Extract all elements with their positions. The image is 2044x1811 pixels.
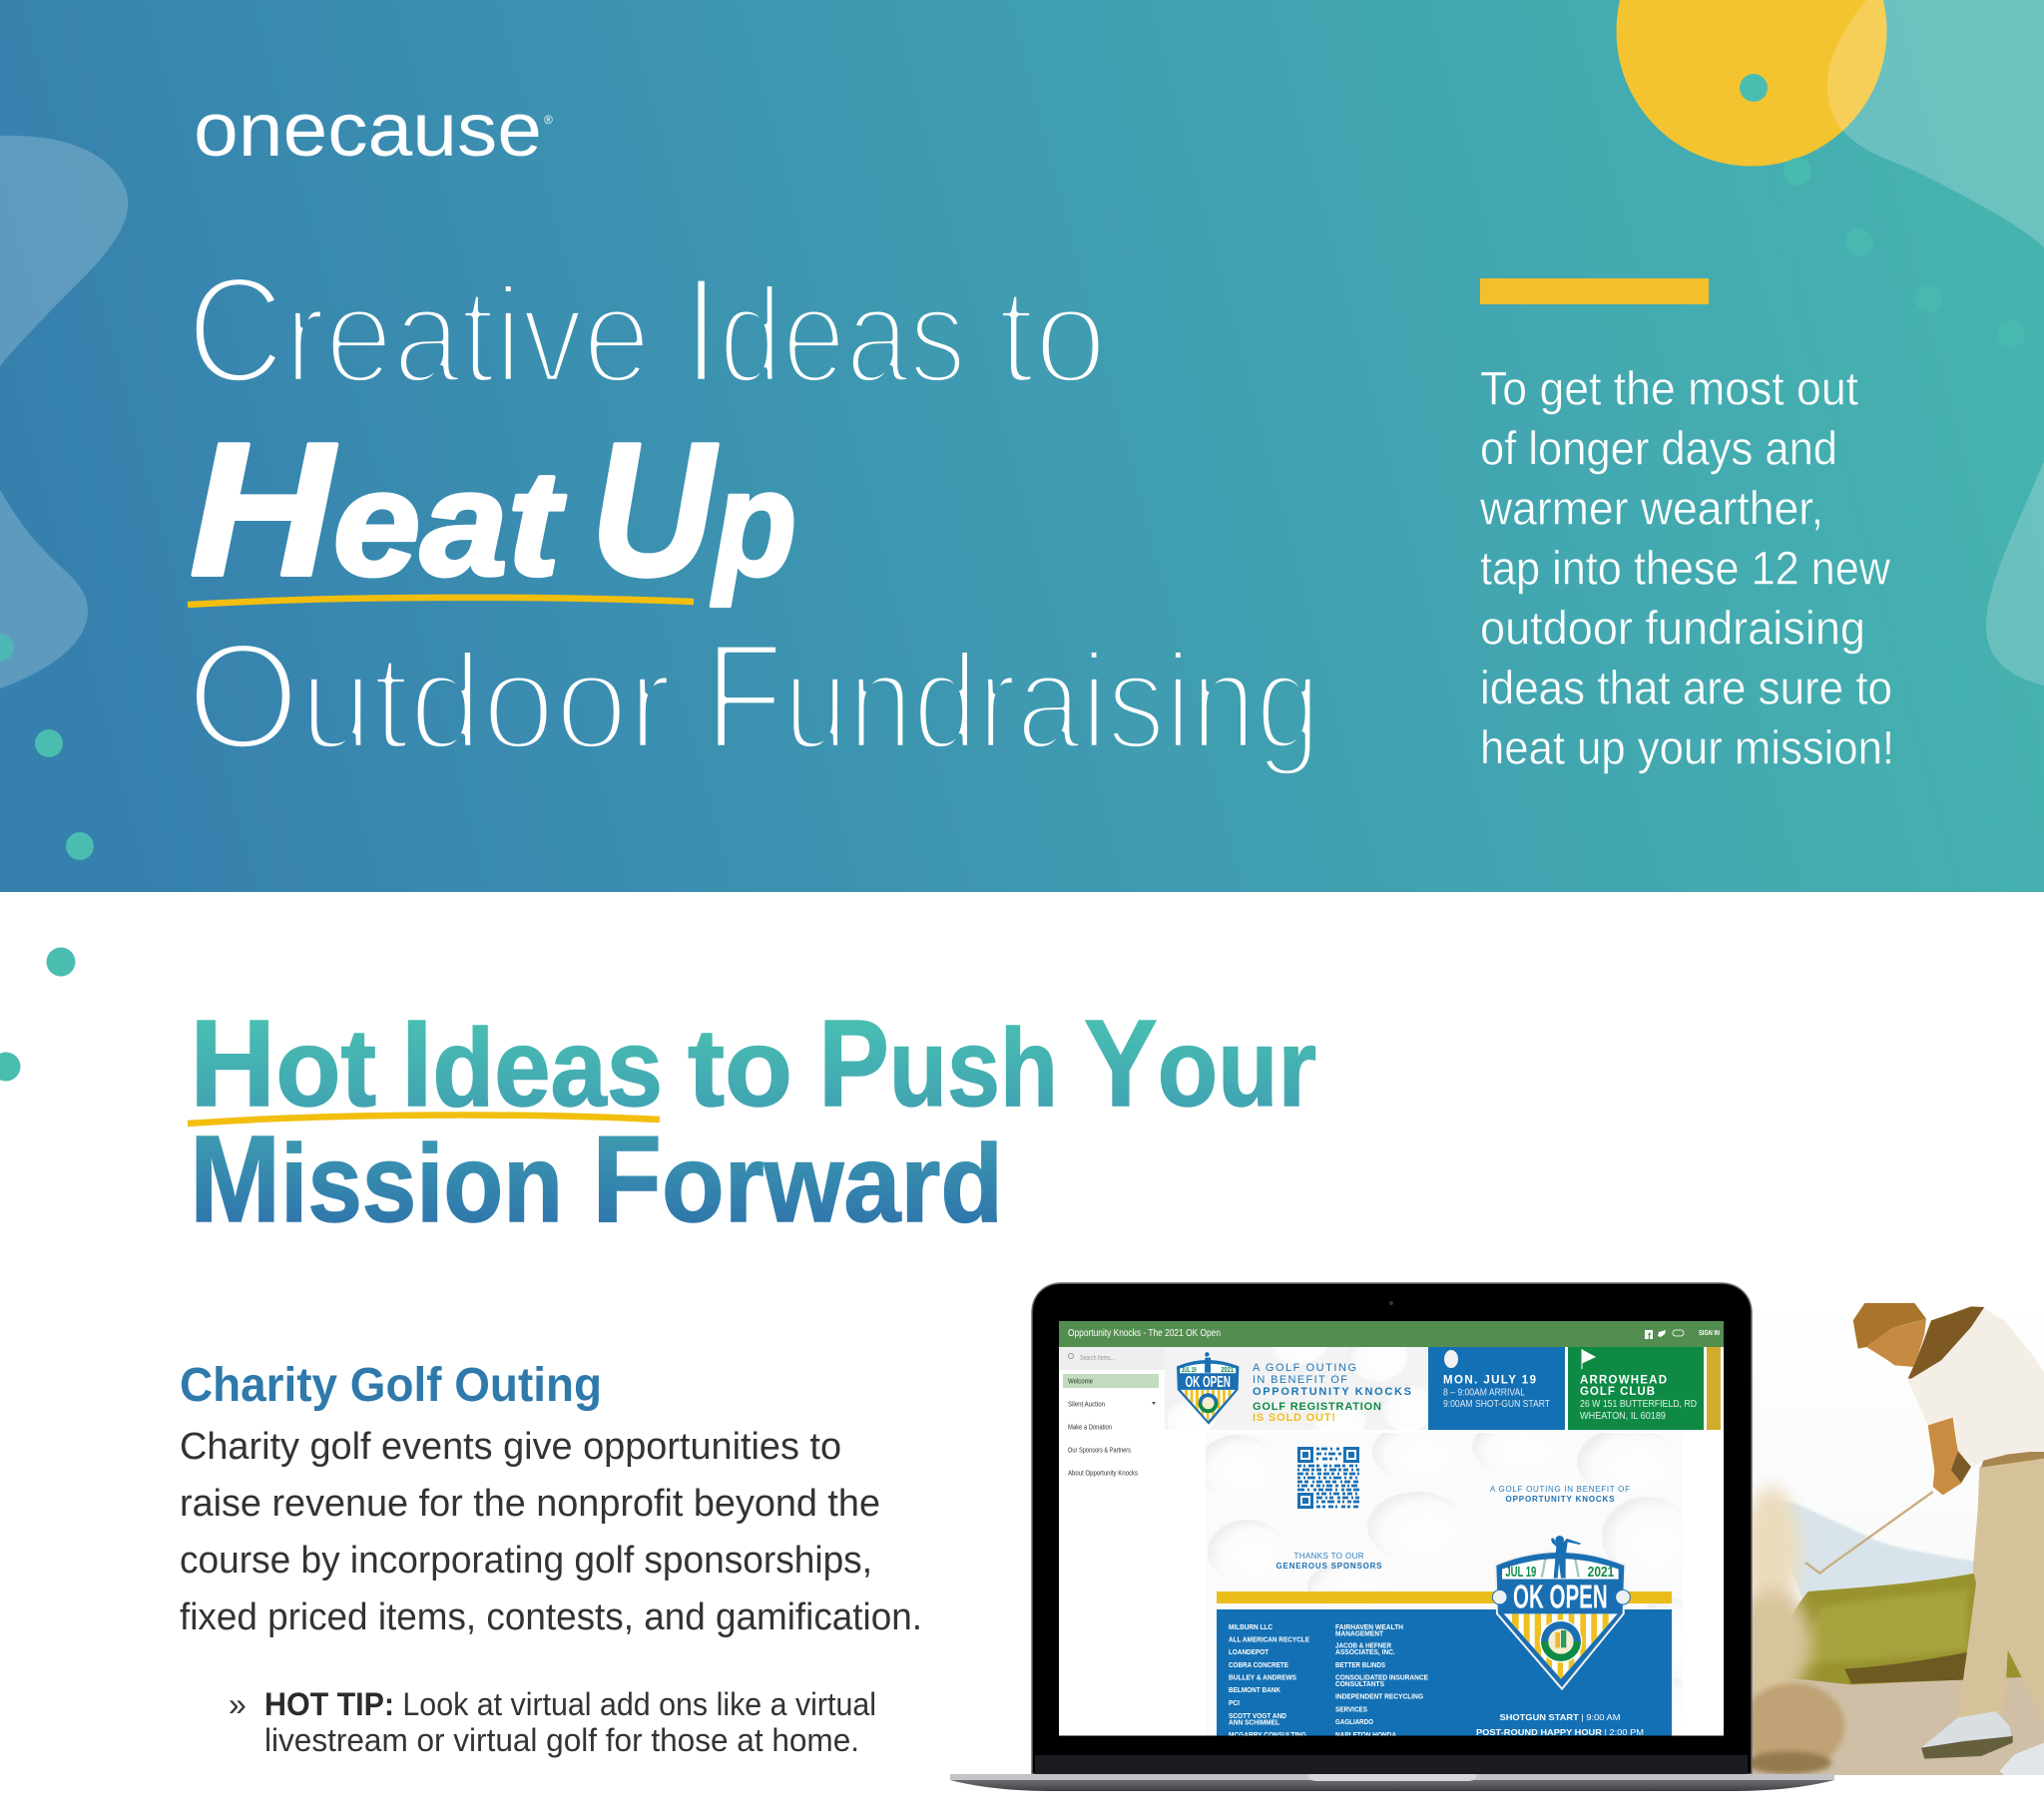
heading underline bbox=[188, 1115, 660, 1124]
screen: event poster: OPPORTUNITY KNOCKS bbox=[1505, 1495, 1615, 1504]
banner: small badge: JUL 19 bbox=[1182, 1367, 1197, 1374]
poster: sponsors panel: ASSOCIATES, INC. bbox=[1335, 1649, 1395, 1656]
title: Creative Ideas to Heat Up Outdoor Fundraising: Up bbox=[591, 404, 796, 616]
intro paragraph: of longer days and bbox=[1480, 421, 1837, 475]
poster: sponsors panel: SHOTGUN START | 9:00 AM bbox=[1499, 1712, 1621, 1722]
callout: hot tip: » bbox=[229, 1686, 247, 1722]
golfer: trousers bbox=[1958, 1458, 2044, 1721]
decorative dots: white section bbox=[0, 948, 76, 1082]
title: Creative Ideas to Heat Up Outdoor Fundraising: Outdoor bbox=[187, 612, 672, 781]
screen: golf banner: IS SOLD OUT! bbox=[1253, 1412, 1335, 1424]
banner: small badge: OK OPEN bbox=[1185, 1374, 1231, 1391]
heading: Hot Ideas to Push Your Mission Forward: Push bbox=[818, 996, 1058, 1132]
poster: QR code bbox=[1297, 1447, 1359, 1509]
poster: sponsors panel: PCI bbox=[1229, 1700, 1240, 1707]
screen: golf banner: A GOLF OUTING bbox=[1253, 1362, 1356, 1374]
logo: onecause: ® bbox=[544, 113, 553, 127]
golfer: shoes bbox=[1921, 1711, 2012, 1750]
screen: golf banner: OPPORTUNITY KNOCKS bbox=[1253, 1386, 1411, 1398]
laptop mockup bbox=[950, 1283, 1834, 1791]
golfer: neck shade bbox=[1908, 1306, 1984, 1379]
photo: golf club bbox=[1805, 1492, 1933, 1574]
screen: golf banner: 9:00AM SHOT-GUN START bbox=[1443, 1399, 1550, 1410]
screen: golf banner: GOLF REGISTRATION bbox=[1253, 1401, 1381, 1413]
screen: green top bar: f bbox=[1648, 1331, 1652, 1341]
screen: green top bar: Opportunity Knocks - The 2021 OK Open bbox=[1068, 1327, 1221, 1339]
photo: sand blast bbox=[1744, 1487, 1799, 1613]
screen: golf banner: ARROWHEAD bbox=[1580, 1375, 1667, 1387]
poster: sponsors panel: NAPLETON HONDA bbox=[1335, 1732, 1396, 1739]
poster: sponsors panel: BELMONT BANK bbox=[1229, 1687, 1280, 1694]
golfer: belt bbox=[1981, 1450, 2044, 1468]
intro paragraph: tap into these 12 new bbox=[1480, 541, 1891, 595]
poster: sponsors panel: SCOTT VOGT AND bbox=[1229, 1713, 1286, 1720]
heading: Hot Ideas to Push Your Mission Forward: Ideas bbox=[401, 996, 663, 1132]
screen: side navigation: Our Sponsors & Partners bbox=[1068, 1445, 1131, 1455]
screen: golf banner: WHEATON, IL 60189 bbox=[1580, 1411, 1666, 1422]
screen: event poster: THANKS TO OUR bbox=[1293, 1552, 1364, 1561]
laptop: base notch bbox=[1308, 1774, 1476, 1781]
poster: yellow strip bbox=[1217, 1591, 1672, 1603]
poster: sponsors panel: FAIRHAVEN WEALTH bbox=[1335, 1624, 1403, 1631]
logo: onecause: onecause bbox=[194, 88, 542, 173]
accent bar bbox=[1480, 278, 1709, 304]
body text: golf description: fixed priced items, contests, and gamification. bbox=[180, 1596, 922, 1638]
banner: small badge bbox=[1177, 1352, 1239, 1425]
screen: event poster bbox=[1206, 1433, 1683, 1736]
poster: sponsors panel: POST-ROUND HAPPY HOUR | 2:00 PM bbox=[1476, 1727, 1644, 1737]
poster: sponsors panel: MCGARRY CONSULTING bbox=[1229, 1732, 1307, 1739]
golfer: face bbox=[1866, 1319, 1926, 1367]
golfer: arm and glove bbox=[1928, 1418, 1971, 1495]
screen: side navigation bbox=[1059, 1347, 1165, 1477]
laptop: camera bbox=[1389, 1301, 1393, 1305]
screen: golf banner: IN BENEFIT OF bbox=[1253, 1374, 1347, 1386]
screen: side navigation: Welcome bbox=[1068, 1377, 1093, 1385]
title: Creative Ideas to Heat Up Outdoor Fundraising: Creative bbox=[187, 245, 651, 415]
photo: distant hills bbox=[1784, 1502, 1974, 1596]
decorative blob: upper right bbox=[1827, 0, 2044, 247]
decorative blob: upper left bbox=[0, 136, 128, 366]
poster: sponsors panel: BULLEY & ANDREWS bbox=[1229, 1675, 1296, 1682]
laptop: base bbox=[950, 1774, 1834, 1791]
poster: sponsors panel: SERVICES bbox=[1335, 1706, 1367, 1714]
photo: grassy hill bbox=[1787, 1573, 2022, 1684]
poster: sponsors panel: CONSOLIDATED INSURANCE bbox=[1335, 1675, 1428, 1682]
title: Creative Ideas to Heat Up Outdoor Fundraising: to bbox=[998, 259, 1107, 412]
laptop: body bbox=[1032, 1283, 1752, 1774]
intro paragraph bbox=[1479, 361, 1894, 774]
screen: golf banner: 26 W 151 BUTTERFIELD, RD bbox=[1580, 1399, 1697, 1410]
screen: side navigation: Search Items... bbox=[1080, 1355, 1115, 1362]
body text: golf description: raise revenue for the nonprofit beyond the bbox=[180, 1483, 880, 1525]
laptop: screen bbox=[1059, 1320, 1724, 1756]
decorative blob: lower right bbox=[1986, 461, 2044, 685]
body text: golf description: Charity golf events give opportunities to bbox=[180, 1426, 841, 1468]
title: Creative Ideas to Heat Up Outdoor Fundraising bbox=[187, 245, 1320, 781]
banner: small badge: 2021 bbox=[1221, 1367, 1234, 1374]
poster: sponsors panel: GAGLIARDO bbox=[1335, 1719, 1373, 1726]
icon: yellow sun bbox=[1617, 0, 1886, 166]
callout: hot tip: livestream or virtual golf for those at home. bbox=[264, 1722, 859, 1758]
screen: side navigation: About Opportunity Knocks bbox=[1068, 1469, 1138, 1477]
screen: event poster: A GOLF OUTING IN BENEFIT OF bbox=[1490, 1485, 1630, 1494]
decorative dots bbox=[0, 74, 2025, 860]
body text: golf description bbox=[180, 1426, 922, 1638]
intro paragraph: outdoor fundraising bbox=[1480, 601, 1865, 655]
title: Creative Ideas to Heat Up Outdoor Fundraising: Ideas bbox=[684, 245, 966, 415]
screen: golf banner: MON. JULY 19 bbox=[1443, 1375, 1536, 1387]
screen: event poster: GENEROUS SPONSORS bbox=[1276, 1562, 1382, 1571]
panel: hero header bbox=[0, 0, 2044, 892]
photo: golfer in bunker bbox=[1732, 1297, 2044, 1786]
intro paragraph: ideas that are sure to bbox=[1480, 661, 1892, 714]
poster: sponsors panel: ANN SCHIMMEL bbox=[1229, 1720, 1280, 1726]
screen: golf banner: GOLF CLUB bbox=[1580, 1386, 1655, 1398]
heading: Hot Ideas to Push Your Mission Forward: Forward bbox=[592, 1112, 1003, 1248]
laptop: base highlight bbox=[950, 1774, 1834, 1780]
screen: green top bar: SIGN IN bbox=[1699, 1330, 1720, 1337]
callout: hot tip: HOT TIP: Look at virtual add ons like a virtual bbox=[264, 1686, 876, 1722]
title: Creative Ideas to Heat Up Outdoor Fundraising: Heat bbox=[190, 404, 566, 616]
poster: sponsors panel: COBRA CONCRETE bbox=[1229, 1662, 1288, 1669]
golfer: shirt bbox=[1908, 1309, 2044, 1467]
heading: Hot Ideas to Push Your Mission Forward: Your bbox=[1084, 996, 1316, 1132]
golfer: hair bbox=[1853, 1303, 1926, 1349]
intro paragraph: warmer wearther, bbox=[1479, 481, 1823, 535]
callout: hot tip bbox=[229, 1686, 876, 1758]
poster: OK Open badge: OK OPEN bbox=[1513, 1580, 1608, 1616]
heading: Hot Ideas to Push Your Mission Forward: Mission bbox=[190, 1112, 563, 1248]
poster: sponsors panel: MANAGEMENT bbox=[1335, 1630, 1384, 1638]
poster: sponsors panel: ALL AMERICAN RECYCLE bbox=[1229, 1636, 1309, 1644]
body text: golf description: course by incorporating golf sponsorships, bbox=[180, 1540, 872, 1582]
poster: sponsors panel: CONSULTANTS bbox=[1335, 1681, 1384, 1688]
heading: Hot Ideas to Push Your Mission Forward bbox=[190, 996, 1316, 1248]
screen: golf banner bbox=[1165, 1347, 1721, 1430]
subheading: Charity Golf Outing: Charity Golf Outing bbox=[180, 1359, 602, 1412]
photo: ground under bunker bbox=[1753, 1676, 2044, 1775]
screen: green top bar bbox=[1059, 1321, 1724, 1347]
poster: OK Open badge: JUL 19 bbox=[1505, 1565, 1536, 1581]
poster: sponsors panel: JACOB & HEFNER bbox=[1335, 1643, 1391, 1650]
title: Creative Ideas to Heat Up Outdoor Fundraising: Fundraising bbox=[705, 612, 1320, 781]
poster: sponsors panel: BETTER BLINDS bbox=[1335, 1662, 1385, 1669]
laptop: lower bezel bbox=[1035, 1755, 1748, 1774]
intro paragraph: heat up your mission! bbox=[1480, 720, 1894, 774]
screen: golf banner: 8 – 9:00AM ARRIVAL bbox=[1443, 1387, 1525, 1399]
poster: sponsors panel: LOANDEPOT bbox=[1229, 1649, 1270, 1656]
screen: side navigation: Silent Auction bbox=[1068, 1399, 1105, 1409]
poster: sponsors panel bbox=[1217, 1609, 1672, 1739]
screen: side navigation: Make a Donation bbox=[1068, 1423, 1112, 1431]
heading: Hot Ideas to Push Your Mission Forward: to bbox=[688, 1007, 792, 1130]
heading: Hot Ideas to Push Your Mission Forward: Hot bbox=[190, 996, 376, 1132]
decorative blob: lower left bbox=[0, 490, 88, 688]
poster: sponsors panel: MILBURN LLC bbox=[1229, 1624, 1273, 1631]
intro paragraph: To get the most out bbox=[1480, 361, 1858, 415]
poster: sponsors panel: INDEPENDENT RECYCLING bbox=[1335, 1694, 1424, 1700]
poster: OK Open badge bbox=[1492, 1536, 1630, 1689]
poster: OK Open badge: 2021 bbox=[1588, 1565, 1614, 1581]
